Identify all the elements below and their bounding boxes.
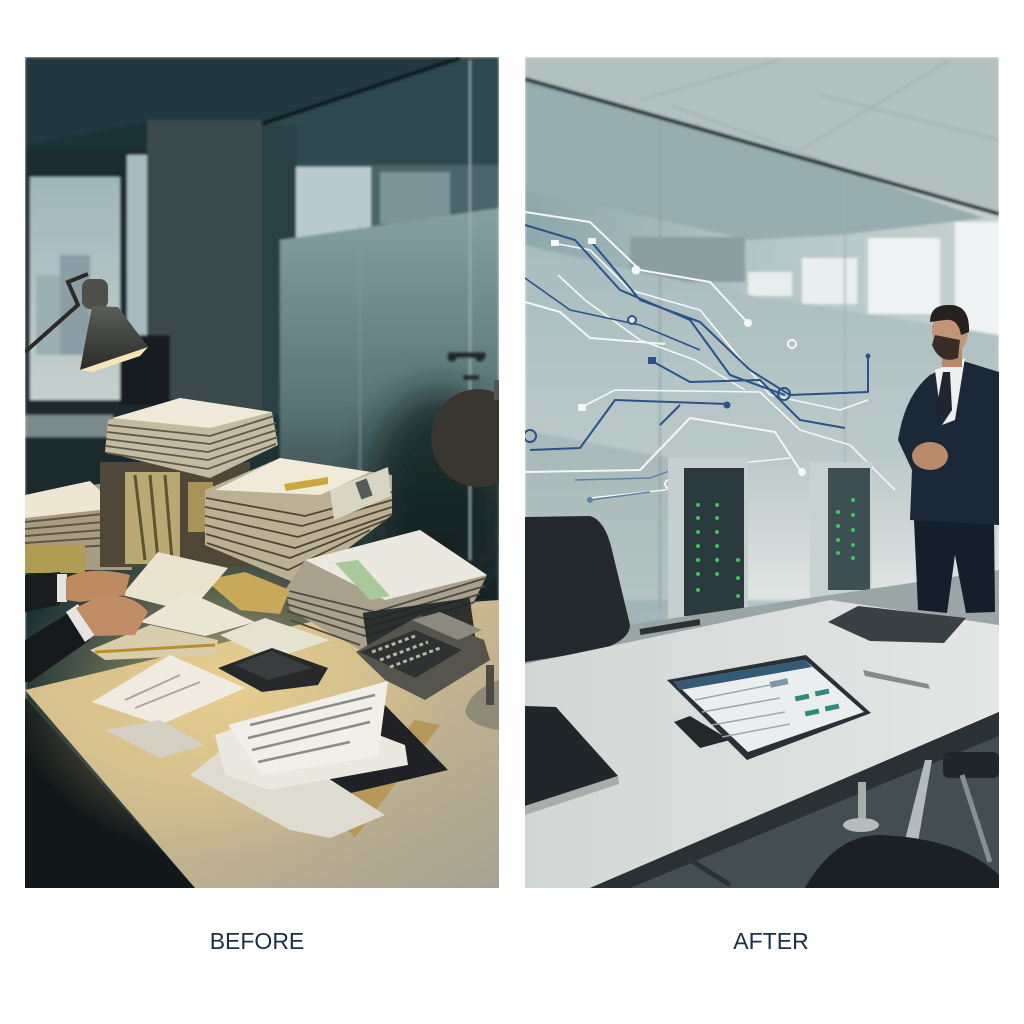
tablet with dashboard [667,655,871,760]
icon: hands [25,571,148,682]
icon: desk lamp left [25,274,148,372]
chair left [525,516,700,662]
server rack right [810,462,872,600]
document stack right [205,530,487,657]
closed folder on table [828,606,966,643]
server rack left [668,458,748,626]
desk surface [25,564,499,888]
document stack middle [205,458,392,585]
floor [525,570,999,888]
table [525,600,999,888]
icon: desk lamp right [431,380,499,730]
pen [863,670,930,689]
icon: small calculator [218,648,328,692]
panel: before photo [10,57,525,888]
panel: after photo [524,57,999,888]
label: after: AFTER [733,928,809,954]
document stack left [25,481,132,573]
invoices on folder [190,681,448,838]
label: before: BEFORE [210,928,304,954]
circuit graphic [524,212,895,503]
cabinet with files [100,462,250,567]
chair right [690,752,999,888]
icon: printing calculator [356,612,490,700]
person in suit [898,305,999,613]
loose papers on desk [90,552,330,758]
document stack top [105,398,278,478]
notebook [525,706,619,815]
